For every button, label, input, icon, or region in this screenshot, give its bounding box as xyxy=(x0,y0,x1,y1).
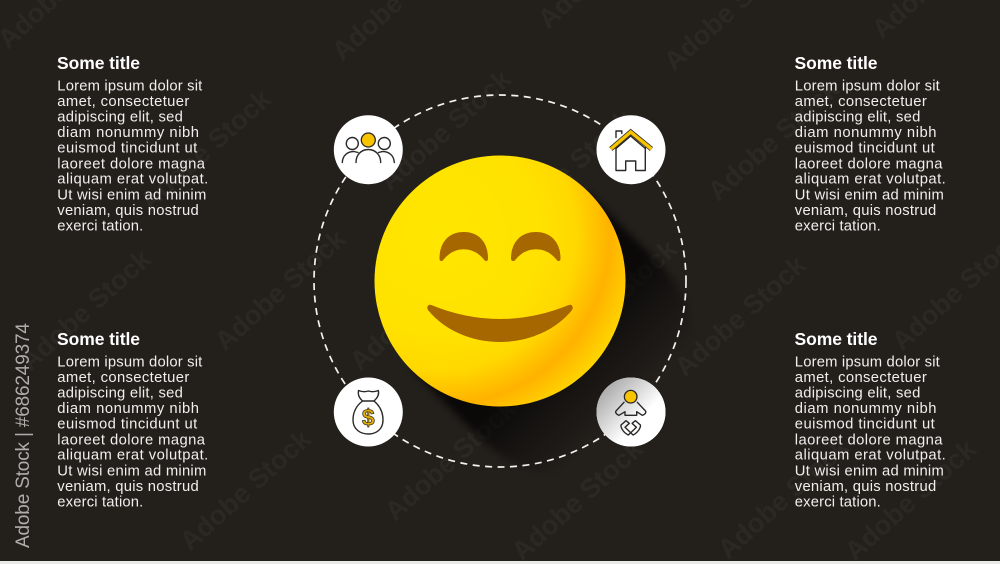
watermark pattern: Adobe Stock xyxy=(344,243,487,376)
text block: bottom left: exerci tation. xyxy=(57,494,143,510)
watermark pattern: Adobe Stock xyxy=(669,249,812,382)
watermark pattern: Adobe Stock xyxy=(702,73,845,206)
text block: top right: aliquam erat volutpat. xyxy=(795,172,946,188)
text block: top right: euismod tincidunt ut xyxy=(795,141,935,157)
text block: bottom left: veniam, quis nostrud xyxy=(57,479,199,495)
left eye xyxy=(440,232,488,261)
watermark pattern: Adobe Stock xyxy=(506,433,649,564)
icon badge: people xyxy=(334,115,403,184)
text block: bottom right: aliquam erat volutpat. xyxy=(795,448,946,464)
text block: bottom left: Lorem ipsum dolor sit xyxy=(57,355,202,371)
watermark pattern: Adobe Stock xyxy=(14,243,157,376)
text block: bottom right: amet, consectetuer xyxy=(795,370,927,386)
watermark pattern: Adobe Stock xyxy=(712,431,855,564)
text block: bottom left: aliquam erat volutpat. xyxy=(57,448,208,464)
text block: bottom right xyxy=(794,329,946,510)
text block: top right xyxy=(794,53,946,234)
mouth xyxy=(429,306,571,340)
text block: bottom right: Ut wisi enim ad minim xyxy=(795,463,944,479)
text block: top right: adipiscing elit, sed xyxy=(795,110,920,126)
text block: top left: Ut wisi enim ad minim xyxy=(57,187,206,203)
text block: bottom right: laoreet dolore magna xyxy=(795,432,943,448)
icon badge: house xyxy=(596,115,666,184)
text block: bottom right: veniam, quis nostrud xyxy=(795,479,936,495)
text block: top left: Lorem ipsum dolor sit xyxy=(57,79,202,95)
text block: top left: exerci tation. xyxy=(57,218,143,234)
watermark pattern: Adobe Stock xyxy=(379,393,522,526)
text block: bottom left: euismod tincidunt ut xyxy=(57,417,197,433)
watermark pattern: Adobe Stock xyxy=(174,423,317,556)
icon badge: money bag: $ xyxy=(362,404,375,430)
text block: top left: amet, consectetuer xyxy=(57,94,189,110)
text block: bottom left: Some title xyxy=(57,329,140,349)
text block: bottom left: diam nonummy nibh xyxy=(57,401,199,417)
face disc xyxy=(374,156,626,406)
text block: bottom right: adipiscing elit, sed xyxy=(795,386,920,402)
text block: top right: Ut wisi enim ad minim xyxy=(795,187,944,203)
text block: top left: aliquam erat volutpat. xyxy=(57,172,208,188)
text block: bottom left: laoreet dolore magna xyxy=(57,432,206,448)
text block: bottom right: diam nonummy nibh xyxy=(795,401,936,417)
long shadow of the face xyxy=(412,193,695,476)
text block: bottom left: adipiscing elit, sed xyxy=(57,386,183,402)
text block: bottom right: euismod tincidunt ut xyxy=(795,417,935,433)
watermark pattern: Adobe Stock xyxy=(496,103,639,236)
bottom edge strip xyxy=(0,561,1000,564)
text block: top left: laoreet dolore magna xyxy=(57,156,206,172)
text block: bottom right: Lorem ipsum dolor sit xyxy=(795,355,940,371)
text block: top left: adipiscing elit, sed xyxy=(57,110,183,126)
text block: top left: diam nonummy nibh xyxy=(57,125,199,141)
text block: top left: euismod tincidunt ut xyxy=(57,141,197,157)
text block: top left xyxy=(57,53,208,234)
text block: top right: Lorem ipsum dolor sit xyxy=(795,79,940,95)
text block: top right: veniam, quis nostrud xyxy=(795,203,936,219)
text block: top left: veniam, quis nostrud xyxy=(57,203,199,219)
icon badge: baby xyxy=(596,378,666,446)
icon badge: money bag xyxy=(334,378,403,446)
right eye xyxy=(512,232,560,261)
watermark pattern: Adobe Stock xyxy=(540,233,683,366)
watermark pattern: Adobe Stock xyxy=(839,433,982,564)
text block: top right: amet, consectetuer xyxy=(795,94,927,110)
text block: top left: Some title xyxy=(57,53,140,73)
text block: bottom left: amet, consectetuer xyxy=(57,370,189,386)
text block: bottom left xyxy=(57,329,208,510)
dashed orbit ring xyxy=(314,95,686,467)
text block: top right: exerci tation. xyxy=(795,218,881,234)
text block: bottom right: exerci tation. xyxy=(795,494,881,510)
text block: top right: diam nonummy nibh xyxy=(795,125,936,141)
smiley face xyxy=(374,156,626,406)
text block: top right: laoreet dolore magna xyxy=(795,156,943,172)
watermark pattern: Adobe Stock xyxy=(134,83,277,216)
stock id side label: Adobe Stock | #686249374 xyxy=(13,323,34,548)
text block: top right: Some title xyxy=(794,53,878,73)
text block: bottom left: Ut wisi enim ad minim xyxy=(57,463,206,479)
watermark pattern: Adobe Stock xyxy=(374,63,517,196)
watermark pattern: Adobe Stock xyxy=(209,223,352,356)
text block: bottom right: Some title xyxy=(794,329,878,349)
